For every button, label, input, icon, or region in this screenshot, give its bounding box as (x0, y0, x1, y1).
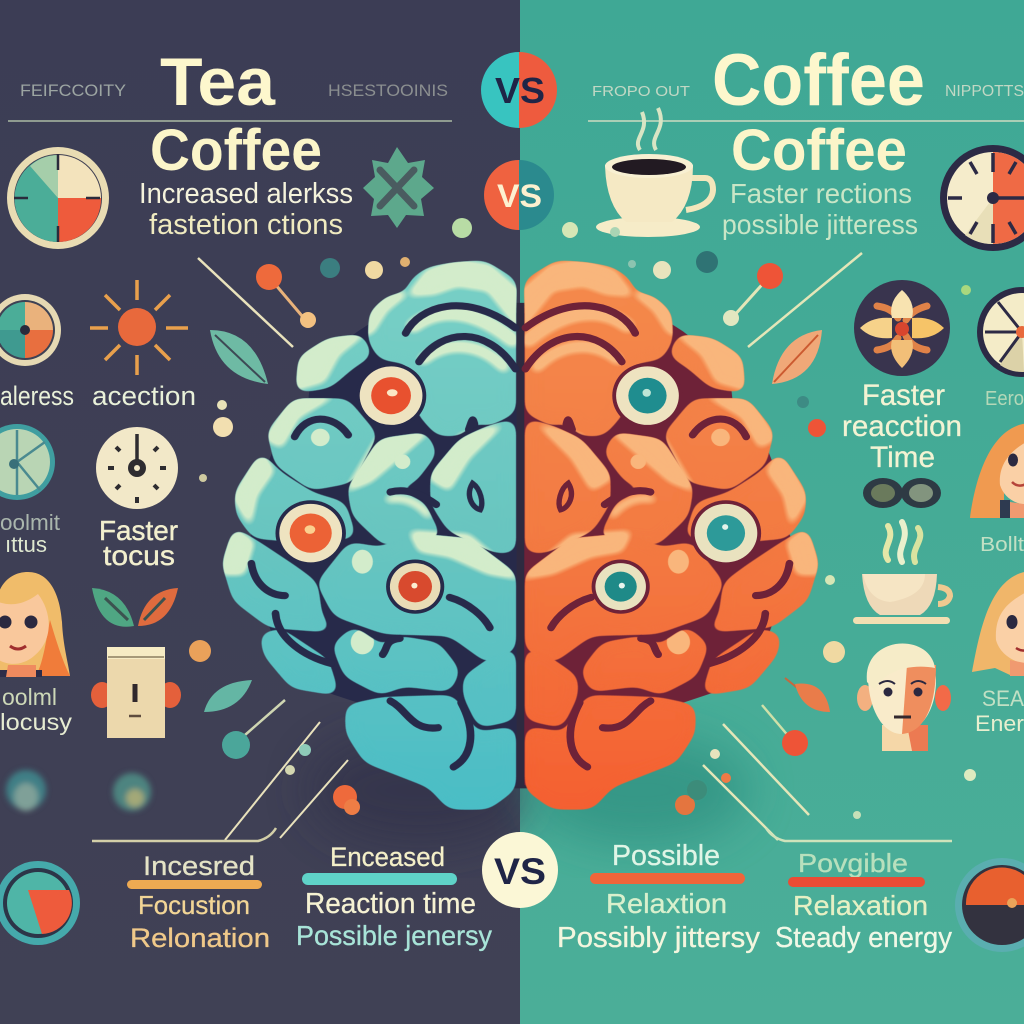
label: top right small: NIPPOTTS (945, 83, 1024, 100)
column: Increased / Reaction time / Possible (296, 842, 492, 951)
icon: wheel teal left (0, 424, 55, 500)
column: Increased / Reaction time / Possible: Enceased (330, 842, 445, 872)
icon: faded blob bottom centre-left (113, 773, 151, 811)
label: right edge Sea Ener (975, 686, 1024, 736)
VS badge: top (481, 52, 557, 128)
icon: man portrait (857, 644, 951, 751)
brain marker: teal 2 (691, 500, 761, 566)
text: right benefits (722, 178, 918, 240)
VS badge: bottom (482, 832, 558, 908)
label: top centre-left small: HSESTOOINIS (328, 81, 448, 100)
icon: orange sun (90, 280, 188, 375)
icon: tea box (91, 647, 181, 738)
label: top centre-right small: FROPO OUT (592, 83, 690, 100)
VS badge: middle: VS (497, 178, 542, 214)
column: Increased / Focus / Relaxation (127, 851, 270, 953)
heading: left Coffee: Coffee (150, 118, 322, 183)
column: Possible / Relaxtion / Possibly jittersy: Relaxtion (606, 888, 727, 919)
column: Increased / Focus / Relaxation: Incesred (143, 851, 255, 881)
label: acection: acection (92, 381, 196, 411)
brain marker: red 1 (356, 363, 426, 429)
rule: bottom right (766, 828, 952, 841)
label: Faster reaction Time: reacction (842, 410, 962, 443)
icon: faded blob bottom left (6, 770, 46, 811)
icon: woman face left (0, 572, 70, 677)
icon: wheel left (0, 294, 61, 366)
column: Increased / Reaction time / Possible: Possible jenersy (296, 920, 492, 951)
icon: leaf right lower (785, 678, 830, 712)
brain marker: red 3 (386, 560, 444, 614)
brain: tea hemisphere (220, 260, 522, 807)
icon: leaf right upper (772, 330, 822, 384)
brain marker: teal 1 (612, 363, 683, 429)
column: Increased / Focus / Relaxation: Relonation (130, 923, 270, 953)
label: Faster focus (99, 515, 178, 571)
heading: right Coffee: Coffee (731, 118, 907, 183)
gauge: bottom right (955, 858, 1024, 952)
label: Faster focus: tocus (103, 540, 175, 571)
divider rule: coffee header (588, 120, 1024, 122)
icon: wheel right (977, 287, 1024, 377)
icon: orange ball on stick right lower (762, 705, 808, 756)
column: Possible / Relaxation / Steady energy: Relaxation (793, 890, 928, 921)
shadow under brain (310, 735, 750, 845)
icon: leaf left upper (210, 330, 268, 384)
column: Increased / Focus / Relaxation: Focustion (138, 890, 250, 920)
decorative rays left (198, 258, 348, 840)
text: left benefits (139, 178, 353, 241)
column: Possible / Relaxation / Steady energy (775, 848, 952, 954)
divider rule: tea header (8, 120, 452, 122)
dots: left scatter (189, 218, 472, 815)
icon: woman face right lower (972, 571, 1024, 676)
icon: orange ball on stick right upper (723, 263, 783, 326)
label: Faster reaction Time (842, 379, 962, 474)
text: right benefits: possible jitteress (722, 209, 918, 240)
column: Possible / Relaxtion / Possibly jittersy: Possibly jittersy (557, 922, 761, 954)
label: right edge Bollt: Bollt (980, 534, 1024, 556)
column: Possible / Relaxtion / Possibly jittersy: Possible (612, 840, 720, 872)
text: left benefits: fastetion ctions (149, 209, 343, 241)
icon: teal ball on stick (222, 700, 285, 759)
gauge: bottom left (0, 861, 80, 945)
label: Faster reaction Time: Faster (862, 379, 945, 412)
column: Possible / Relaxation / Steady energy: Steady energy (775, 922, 952, 954)
label: left lower faded text: locusy (0, 709, 73, 735)
label: Faster focus: Faster (99, 515, 178, 546)
brain marker: teal 3 (592, 560, 650, 614)
label: left faded text: oolmit (0, 510, 60, 535)
background: coffee side (520, 0, 1024, 1024)
icon: flower badge right (854, 280, 950, 376)
icon: twin leaves (92, 588, 178, 627)
label: right edge Sea Ener: Ener (975, 711, 1024, 736)
text: left benefits: Increased alerkss (139, 178, 353, 210)
rule: bottom left (92, 828, 276, 841)
VS badge: middle (484, 160, 554, 230)
icon: green star flower (363, 147, 434, 228)
brain: coffee hemisphere (519, 260, 821, 807)
icon: woman face right upper (970, 423, 1024, 518)
column: Possible / Relaxtion / Possibly jittersy (557, 840, 761, 954)
label: Faster reaction Time: Time (870, 441, 935, 474)
label: aleress: aleress (0, 381, 74, 411)
label: top left small: FEIFCCOITY (20, 81, 126, 100)
label: left lower faded text: oolml (2, 684, 57, 710)
label: left faded text: ıttus (5, 532, 47, 557)
title: Tea: Tea (160, 44, 276, 120)
decorative rays right (703, 253, 862, 840)
icon: clock top right (940, 145, 1024, 251)
text: right benefits: Faster rections (730, 178, 912, 209)
column: Increased / Reaction time / Possible: Reaction time (305, 888, 476, 920)
background: tea side (0, 0, 520, 1024)
brain (220, 260, 821, 807)
icon: coffee cup (596, 108, 713, 237)
icon: tea cup (853, 574, 950, 624)
icon: glasses (863, 478, 941, 508)
title: Coffee: Coffee (712, 40, 925, 121)
dots: right scatter (562, 222, 976, 819)
icon: cream stopwatch (96, 427, 178, 509)
icon: orange ball on stick left (256, 264, 316, 328)
VS badge: bottom: VS (494, 851, 546, 892)
icon: clock top left (7, 147, 109, 249)
label: left lower faded text (0, 684, 73, 735)
brain marker: red 2 (275, 500, 346, 566)
VS badge: top: VS (495, 70, 545, 111)
column: Possible / Relaxation / Steady energy: Povgible (798, 848, 908, 878)
icon: leaf left lower (204, 680, 252, 712)
icon: steam (886, 522, 920, 562)
label: left faded text (0, 510, 60, 557)
